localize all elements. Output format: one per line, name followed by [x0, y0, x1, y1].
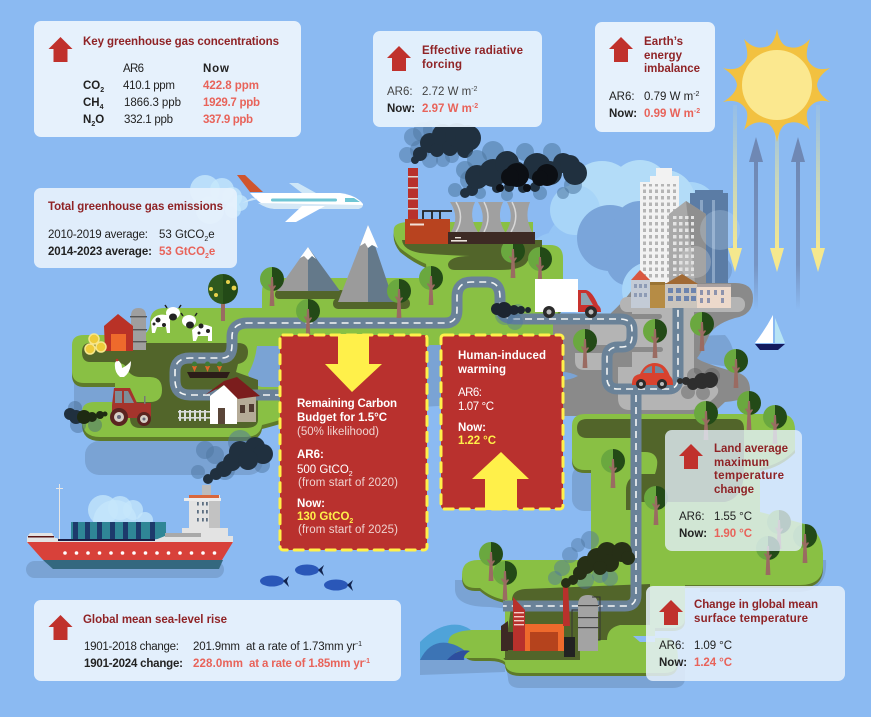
panel: key greenhouse gas concentrations: 422.8 ppm [203, 80, 259, 92]
island: green land right and bottom [462, 414, 823, 676]
panel: effective radiative forcing: AR6: [387, 86, 413, 98]
panel: global mean sea-level rise: 1901-2024 change: [84, 658, 183, 670]
panel: land average maximum temperature change: maximum [714, 457, 769, 469]
panel: total greenhouse gas emissions [34, 188, 237, 268]
panel: earth's energy imbalance: Now: [609, 108, 637, 120]
panel: effective radiative forcing: -2 [471, 86, 478, 93]
town houses [631, 270, 731, 308]
panel: earth's energy imbalance: -2 [693, 91, 700, 98]
panel: remaining carbon budget: AR6: [297, 449, 324, 461]
panel: global mean sea-level rise: 228.0mm [193, 658, 243, 670]
city skyline [640, 168, 740, 283]
panel: earth's energy imbalance: 0.99 W m [644, 108, 694, 120]
panel: total greenhouse gas emissions: 2014-2023 average: [48, 246, 152, 258]
panel: remaining carbon budget: (from start of 2020) [298, 477, 398, 489]
road network [175, 282, 678, 606]
fence [178, 410, 211, 421]
panel: key greenhouse gas concentrations: Key greenhouse gas concentrations [83, 36, 279, 48]
panel: human-induced warming: 1.22 °C [458, 435, 496, 447]
panel: key greenhouse gas concentrations: 4 [100, 104, 104, 111]
panel: remaining carbon budget: 2 [349, 518, 353, 525]
panel: land average maximum temperature change: 1.55 °C [714, 511, 752, 523]
smoke under farm [191, 430, 273, 484]
arrow: warming up [472, 452, 529, 510]
panel: key greenhouse gas concentrations: 2 [100, 87, 104, 94]
panel: remaining carbon budget: 2 [349, 471, 353, 478]
tractor smoke [64, 401, 108, 433]
panel: remaining carbon budget: (from start of 2025) [298, 524, 398, 536]
panel: earth's energy imbalance [595, 22, 715, 132]
wave [420, 625, 505, 660]
panel: effective radiative forcing: Effective radiative [422, 45, 523, 57]
vegetable bed [187, 362, 230, 378]
car smoke [677, 368, 720, 400]
panel: earth's energy imbalance: energy [644, 50, 683, 62]
mountains [277, 225, 394, 302]
panel: change in global mean surface temperature: Change in global mean [694, 599, 818, 611]
panel: human-induced warming: Now: [458, 422, 486, 434]
panel: total greenhouse gas emissions: Total greenhouse gas emissions [48, 201, 223, 213]
truck [535, 279, 601, 318]
panel: global mean sea-level rise: Global mean sea-level rise [83, 614, 227, 626]
panel: human-induced warming: AR6: [458, 387, 482, 399]
panel: total greenhouse gas emissions: 2 [205, 253, 209, 260]
panel: land average maximum temperature change: 1.90 °C [714, 528, 752, 540]
tractor [110, 388, 151, 426]
panel: earth's energy imbalance: imbalance [644, 63, 700, 75]
panel: land average maximum temperature change: change [714, 484, 754, 496]
top factory and cooling towers [405, 168, 535, 244]
cargo ship [26, 484, 233, 578]
panel: earth's energy imbalance: -2 [694, 108, 700, 115]
panel: global mean sea-level rise: at a rate of 1.85mm yr [249, 658, 364, 670]
panel: change in global mean surface temperature: 1.09 °C [694, 640, 732, 652]
smoke from cooling towers [448, 141, 587, 201]
panel: key greenhouse gas concentrations: 337.9 ppb [203, 114, 253, 126]
panel: human-induced warming: Human-induced [458, 350, 546, 362]
panel: land average maximum temperature change: temperature [714, 470, 784, 482]
panel: change in global mean surface temperature: AR6: [659, 640, 685, 652]
panel: key greenhouse gas concentrations: 410.1 ppm [123, 80, 175, 92]
panel: total greenhouse gas emissions: 53 GtCO [159, 229, 204, 241]
bottom factory smoke [548, 531, 635, 589]
panel: human-induced warming: warming [457, 364, 506, 376]
panel: key greenhouse gas concentrations: 332.1 ppb [124, 114, 173, 126]
panel: key greenhouse gas concentrations: N [83, 114, 91, 126]
panel: key greenhouse gas concentrations: Now [203, 63, 229, 75]
sun [723, 29, 830, 142]
panel: earth's energy imbalance: AR6: [609, 91, 635, 103]
panel: effective radiative forcing: Now: [387, 103, 415, 115]
panel: global mean sea-level rise: -1 [356, 641, 362, 648]
panel: total greenhouse gas emissions: 2010-2019 average: [48, 229, 148, 241]
bottom factory [501, 585, 600, 657]
fish [260, 564, 353, 591]
panel: change in global mean surface temperature: surface temperature [694, 613, 808, 625]
panel: change in global mean surface temperature [646, 586, 845, 681]
panel: remaining carbon budget [280, 334, 427, 550]
trees [260, 239, 817, 600]
farmhouse [205, 377, 260, 424]
panel: land average maximum temperature change [665, 430, 802, 551]
panel: key greenhouse gas concentrations: O [95, 114, 104, 126]
cows [151, 305, 212, 341]
land shadows [74, 335, 826, 688]
panel: land average maximum temperature change: AR6: [679, 511, 705, 523]
chicken [115, 359, 131, 377]
panel: land average maximum temperature change: Now: [679, 528, 707, 540]
panel: key greenhouse gas concentrations: AR6 [123, 63, 144, 75]
panel: effective radiative forcing: 2.72 W m [422, 86, 471, 98]
island: main green land left and centre [72, 222, 563, 441]
panel: effective radiative forcing: 2.97 W m [422, 103, 472, 115]
sun rays down and heat arrows up [728, 105, 825, 310]
panel: earth's energy imbalance: Earth’s [644, 36, 683, 48]
panel: remaining carbon budget: Budget for 1.5°C [297, 412, 387, 424]
panel: remaining carbon budget: (50% likelihood) [297, 426, 379, 438]
panel: total greenhouse gas emissions: 53 GtCO [159, 246, 205, 258]
plane [190, 175, 363, 224]
panel: human-induced warming: 1.07 °C [458, 401, 494, 413]
panel: global mean sea-level rise: -1 [364, 658, 370, 665]
panel: total greenhouse gas emissions: e [209, 246, 215, 258]
panel: earth's energy imbalance: 0.79 W m [644, 91, 693, 103]
panel: remaining carbon budget: 130 GtCO [297, 511, 349, 523]
panel: land average maximum temperature change: Land average [714, 443, 788, 455]
arrow: carbon budget down [325, 334, 382, 392]
city grey land [553, 283, 753, 416]
panel: change in global mean surface temperature: Now: [659, 657, 687, 669]
panel: human-induced warming [441, 335, 563, 510]
panel: global mean sea-level rise [34, 600, 401, 681]
panel: key greenhouse gas concentrations: CH [83, 97, 100, 109]
panel: key greenhouse gas concentrations [34, 21, 301, 137]
red car [632, 363, 673, 389]
panel: remaining carbon budget: Now: [297, 498, 325, 510]
panel: key greenhouse gas concentrations: CO [83, 80, 100, 92]
panel: remaining carbon budget: 500 GtCO [297, 464, 349, 476]
panel: key greenhouse gas concentrations: 1929.7 ppb [203, 97, 260, 109]
pear tree [208, 274, 238, 321]
panel: remaining carbon budget: Remaining Carbon [297, 398, 397, 410]
panel: effective radiative forcing: -2 [472, 103, 478, 110]
panel: effective radiative forcing [373, 31, 542, 127]
panel: total greenhouse gas emissions: 2 [204, 236, 208, 243]
sailboat [755, 315, 785, 350]
panel: total greenhouse gas emissions: e [208, 229, 215, 241]
panel: key greenhouse gas concentrations: 2 [91, 121, 95, 128]
panel: global mean sea-level rise: 201.9mm [193, 641, 240, 653]
panel: global mean sea-level rise: 1901-2018 change: [84, 641, 179, 653]
clouds behind city [520, 160, 732, 318]
truck smoke [491, 302, 531, 330]
panel: change in global mean surface temperature: 1.24 °C [694, 657, 732, 669]
barn silo and hay [85, 308, 147, 354]
panel: effective radiative forcing: forcing [422, 59, 462, 71]
panel: key greenhouse gas concentrations: 1866.3 ppb [124, 97, 181, 109]
panel: global mean sea-level rise: at a rate of 1.73mm yr [246, 641, 356, 653]
smoke from factory chimney [399, 120, 481, 168]
